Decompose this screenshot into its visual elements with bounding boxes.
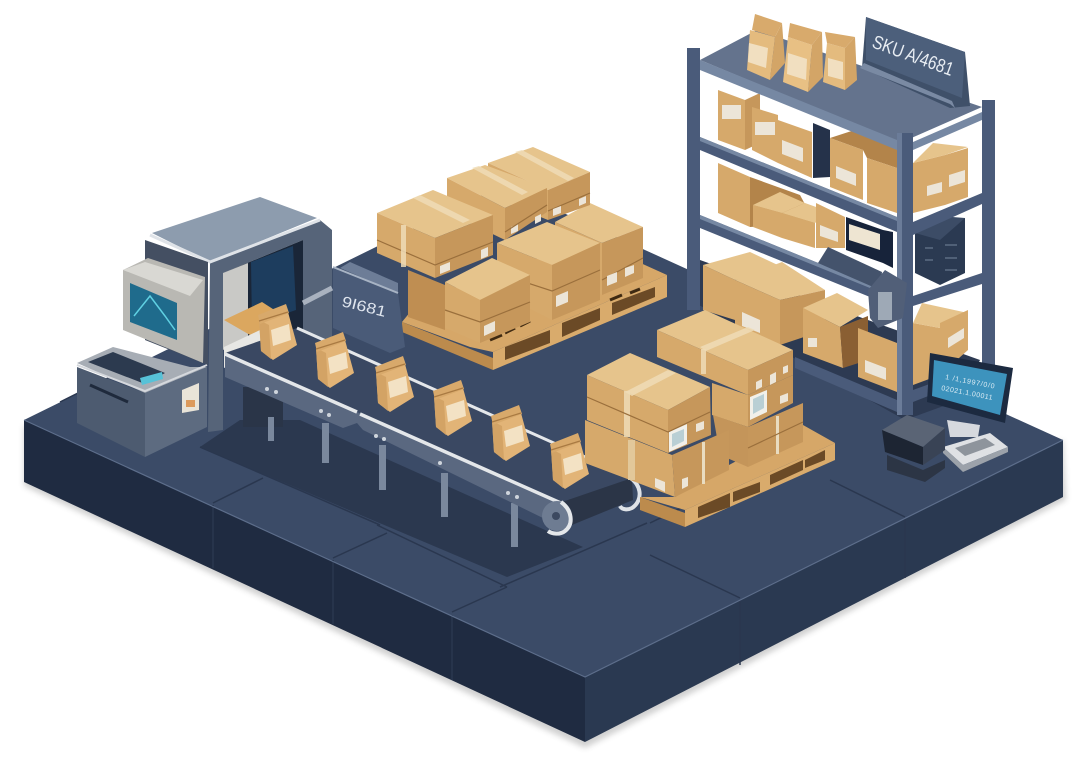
rear right post <box>982 100 995 365</box>
far rim <box>620 475 640 509</box>
bag 3 <box>823 32 857 90</box>
box: front upper <box>587 353 711 453</box>
inspection machine <box>77 197 332 457</box>
product bag 4 <box>433 380 472 436</box>
monitor <box>927 353 1013 437</box>
control console <box>77 347 207 457</box>
server unit <box>915 216 965 285</box>
shelving unit <box>687 14 995 415</box>
product bag 3 <box>375 356 414 412</box>
far rail highlight <box>297 328 632 478</box>
scanner unit <box>818 247 907 328</box>
computer base <box>887 455 945 482</box>
keyboard <box>943 433 1008 472</box>
belt <box>225 328 632 502</box>
tunnel opening <box>223 240 303 368</box>
product bag 2 <box>315 332 354 388</box>
platform <box>24 185 1063 742</box>
SKU sign <box>860 17 970 108</box>
monitor: 02021.1.00011 <box>941 385 993 402</box>
bag 2 <box>783 23 823 92</box>
platform right wall <box>585 440 1063 742</box>
sign text: 9I681 <box>340 293 388 321</box>
pallet <box>640 425 835 527</box>
top shelf bags <box>747 14 857 92</box>
monitor screen <box>130 283 177 340</box>
monitor text: 1 /1,1997/0/0 <box>945 374 995 391</box>
console label <box>182 383 199 413</box>
product bags on conveyor <box>258 304 297 360</box>
front post <box>897 133 913 415</box>
machine right face <box>208 220 332 432</box>
box: front <box>445 258 530 343</box>
front roller face <box>562 478 633 527</box>
platform top floor <box>24 185 1063 677</box>
side rail <box>225 355 563 528</box>
box: rear top <box>488 147 590 220</box>
box: top middle <box>447 165 547 240</box>
machine left face <box>145 240 208 365</box>
pallet with stacked boxes, front <box>585 310 835 527</box>
floor shadow under shelf <box>690 260 980 420</box>
product bag 5 <box>491 405 530 461</box>
bag 1 <box>258 304 297 360</box>
machine top <box>152 197 317 262</box>
rear left post <box>687 48 700 310</box>
shelf 2 boxes <box>718 163 965 285</box>
shelf board 3 <box>700 215 982 308</box>
monitor housing <box>123 258 205 363</box>
shelf 1 boxes <box>718 90 968 213</box>
computer <box>882 415 945 465</box>
pallet with stacked boxes, back <box>377 147 667 370</box>
display device <box>846 217 893 268</box>
pallet <box>402 240 667 370</box>
SKU sign text: SKU A/4681 <box>869 32 956 81</box>
box: front lower <box>585 420 729 497</box>
shelf board 4 <box>795 357 982 412</box>
top shelf surface <box>700 30 982 150</box>
box: large top left <box>377 190 493 278</box>
product bag 6 <box>550 433 589 489</box>
soft shadow <box>24 425 1066 748</box>
box: rear mid <box>712 375 793 427</box>
near roller <box>542 501 572 534</box>
workstation <box>882 353 1013 482</box>
floor shadow under conveyor <box>200 420 583 577</box>
near rail highlight <box>225 354 563 504</box>
box: lower left <box>408 270 445 330</box>
shelf 3 boxes <box>703 252 968 392</box>
legs <box>243 387 518 547</box>
box: centre <box>497 222 600 320</box>
shelf board 2 <box>700 137 982 235</box>
box: rear low <box>713 403 803 467</box>
sign: floor stand <box>333 262 405 353</box>
box: rear upper <box>657 310 793 395</box>
conveyor <box>225 328 640 547</box>
box: rear right <box>555 203 643 295</box>
bag 1 <box>747 14 785 80</box>
platform left wall <box>24 420 585 742</box>
